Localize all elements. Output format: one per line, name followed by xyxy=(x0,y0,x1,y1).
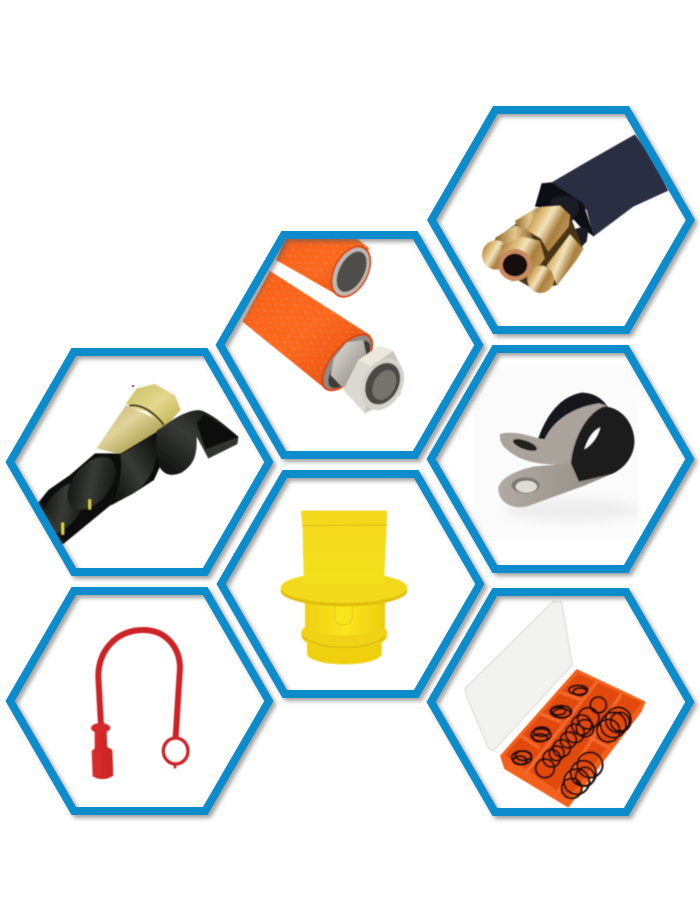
hexagon frame xyxy=(221,474,480,694)
hexagon frame xyxy=(432,110,690,330)
icon: orange hoses with steel nut xyxy=(242,238,413,418)
metal backing xyxy=(483,207,583,290)
hexagon frame xyxy=(431,592,690,812)
hexagon frame xyxy=(10,591,269,811)
icon: black O-rings xyxy=(512,685,631,798)
icon: yellow plug xyxy=(281,511,407,664)
icon: P-clamp xyxy=(498,392,637,524)
hexagon frame xyxy=(10,352,269,572)
icon: red dot artefact xyxy=(132,385,134,387)
panel: orange O-ring kit xyxy=(431,592,690,812)
hexagon frame xyxy=(220,235,479,455)
icon: hose bundle in fabric sleeve xyxy=(482,134,668,293)
panel: yellow plastic plug xyxy=(221,474,480,694)
icon: red plug with lanyard xyxy=(91,630,188,779)
panel: orange fire sleeve hose xyxy=(220,235,479,455)
panel: braided sleeve hose bundle xyxy=(432,110,690,330)
hexagon frame xyxy=(431,349,690,569)
icon: O-ring box xyxy=(465,601,646,808)
panel: rubber lined P-clamp xyxy=(431,349,690,569)
panel: spiral hose guard xyxy=(10,352,269,572)
icon: black spiral guard on hose fitting xyxy=(32,384,238,544)
panel: red dust cap with lanyard xyxy=(10,591,269,811)
